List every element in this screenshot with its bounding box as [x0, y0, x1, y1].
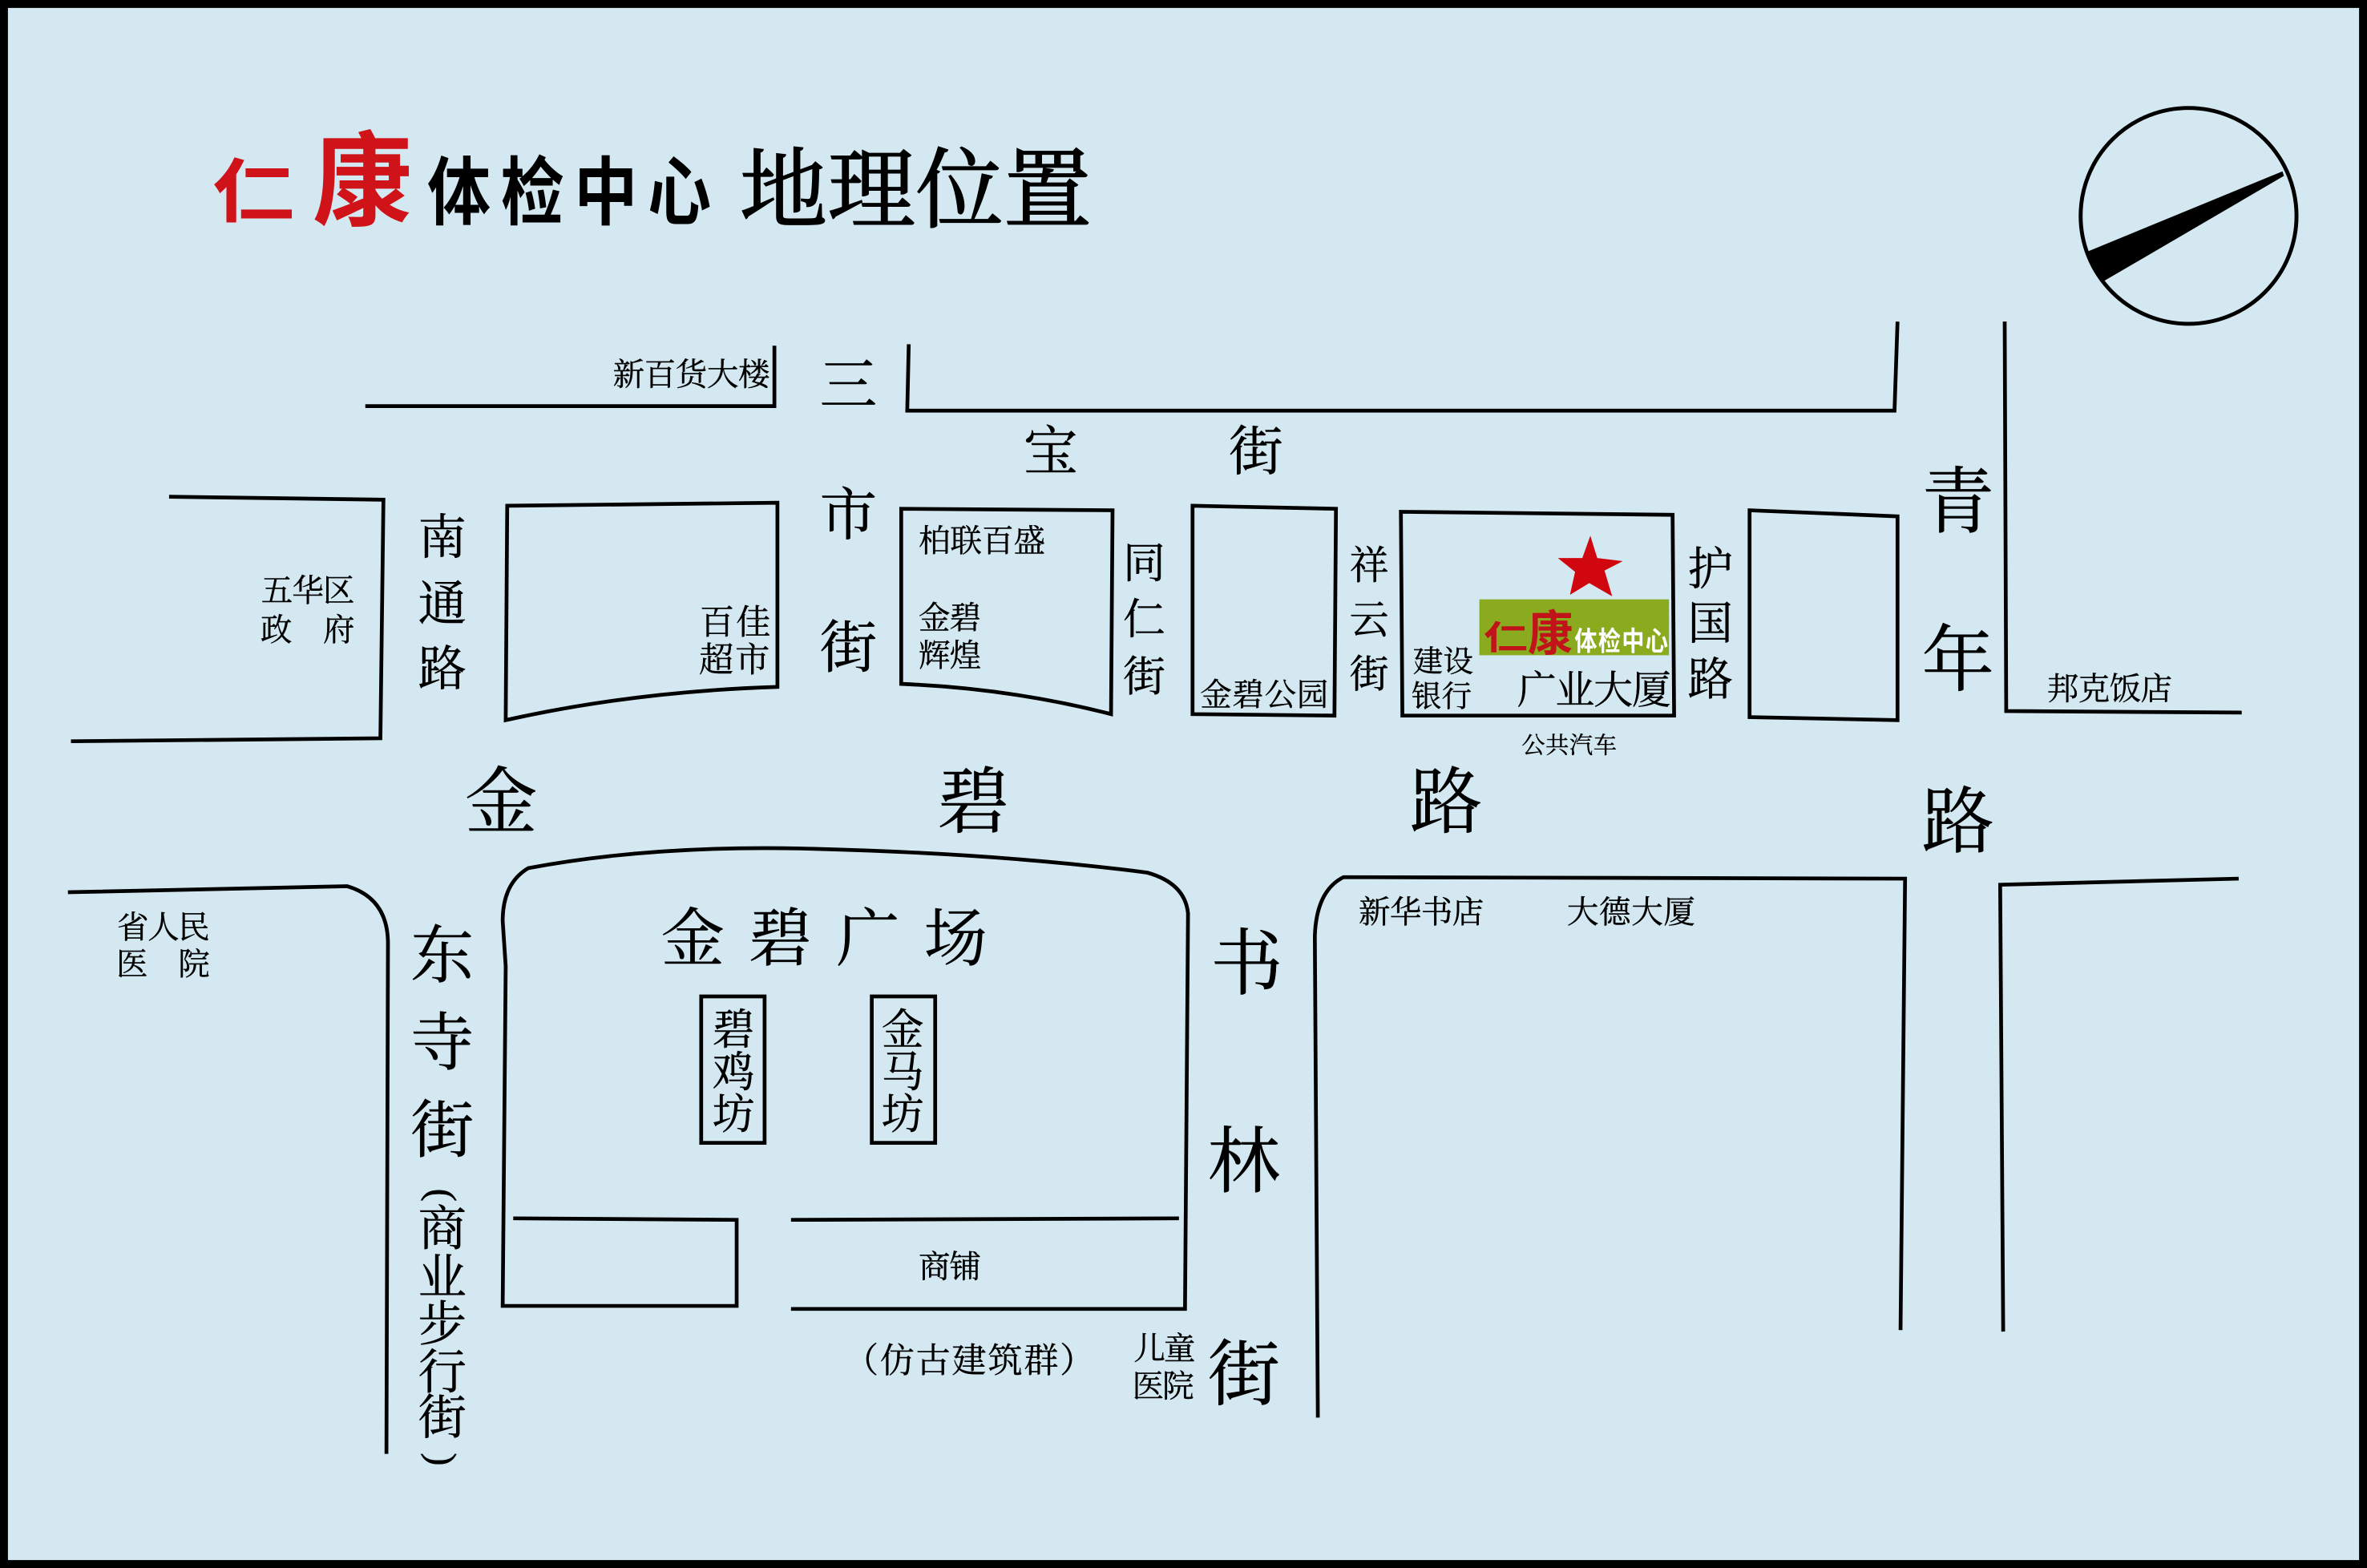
road: 书林街	[1208, 923, 1283, 1415]
road: 祥云街: 云	[1350, 598, 1389, 642]
label: 建设银行: 银行	[1412, 680, 1472, 713]
label: 金碧辉煌: 辉煌	[919, 638, 981, 673]
label: 五华区政府: 五华区	[261, 574, 355, 609]
label: 广业大厦: 广业大厦	[1517, 668, 1671, 712]
road: 同仁街: 街	[1123, 654, 1165, 701]
sign: 仁康体检中心: 康	[1528, 607, 1573, 661]
road note: 商业步行街: 步	[418, 1298, 467, 1352]
label: 儿童医院: 医院	[1132, 1369, 1194, 1404]
road: 南通路: 南	[418, 511, 467, 565]
road: 三市街: 市	[820, 484, 877, 548]
label: 建设银行	[1412, 645, 1473, 713]
logo: 仁康	[213, 125, 412, 240]
label: 五华区政府: 政 府	[261, 612, 355, 648]
label: 新华书店: 新华书店	[1359, 895, 1484, 931]
road: 祥云街: 祥	[1350, 544, 1389, 588]
label: 省人民医院	[116, 910, 210, 983]
plaza label: 金碧广场: 碧	[749, 905, 812, 975]
road note: 商业步行街	[418, 1189, 467, 1466]
label: 建设银行: 建设	[1413, 645, 1473, 679]
label: 百佳超市: 超市	[699, 641, 769, 680]
road: 东寺街	[410, 922, 475, 1166]
sign: 仁康体检中心	[1480, 600, 1669, 661]
label: 商铺: 商铺	[919, 1250, 981, 1285]
label: 碧鸡坊: 坊	[713, 1092, 755, 1138]
sign: 仁康体检中心: 体检中心	[1574, 626, 1668, 657]
road: 护国路: 护	[1688, 545, 1733, 595]
sign: 仁康体检中心: 仁	[1484, 619, 1528, 657]
label: 碧鸡坊	[713, 1008, 755, 1138]
road: 金碧路: 碧	[938, 762, 1010, 843]
label: 百佳超市	[699, 604, 770, 680]
label: 金碧公园: 金碧公园	[1200, 677, 1328, 713]
label: 省人民医院: 医 院	[116, 948, 210, 983]
label: 儿童医院	[1132, 1332, 1196, 1404]
road note: 商业步行街: 街	[418, 1392, 467, 1445]
title: 体检中心: 体检中心	[427, 152, 711, 236]
label: 公共汽车: 公共汽车	[1521, 733, 1617, 759]
road: 宝街	[1024, 422, 1283, 483]
road: 南通路	[418, 511, 467, 697]
label: 金马坊	[882, 1008, 924, 1138]
label: 柏联百盛: 柏联百盛	[919, 523, 1045, 559]
road: 书林街: 街	[1208, 1334, 1280, 1415]
label: 省人民医院: 省人民	[117, 910, 210, 945]
road: 三市街: 三	[820, 354, 877, 418]
plaza label: 金碧广场: 场	[924, 905, 988, 975]
road: 南通路: 路	[418, 643, 467, 697]
road note: 商业步行街: )	[420, 1453, 464, 1466]
road: 金碧路: 路	[1410, 762, 1482, 843]
road: 青年路: 路	[1921, 782, 1994, 863]
road: 书林街: 书	[1210, 923, 1283, 1004]
label: 金马坊: 马	[882, 1049, 924, 1096]
road: 同仁街: 仁	[1123, 596, 1165, 643]
road note: 商业步行街: 业	[418, 1251, 467, 1305]
label: 新百货大楼: 新百货大楼	[613, 358, 770, 393]
map labels	[116, 354, 2172, 1466]
plaza label: 金碧广场: 广	[836, 905, 899, 975]
label: 五华区政府	[261, 574, 355, 648]
road: 金碧路	[465, 762, 1482, 843]
road: 金碧路: 金	[465, 762, 537, 843]
title	[213, 125, 1092, 240]
label: 百佳超市: 百佳	[700, 604, 770, 642]
road: 三市街	[820, 354, 877, 681]
road: 护国路: 国	[1688, 600, 1733, 649]
label: 金碧辉煌: 金碧	[919, 600, 981, 636]
label: 儿童医院: 儿童	[1133, 1332, 1196, 1367]
road: 青年路	[1921, 462, 1994, 863]
road: 护国路	[1688, 545, 1733, 705]
title: 地理位置: 地理位置	[740, 143, 1092, 240]
road: 同仁街	[1123, 541, 1165, 701]
road: 护国路: 路	[1688, 656, 1733, 705]
road: 东寺街: 街	[410, 1097, 474, 1166]
plaza label: 金碧广场	[661, 905, 988, 975]
road: 同仁街: 同	[1123, 541, 1165, 588]
road: 东寺街: 寺	[410, 1009, 474, 1079]
road note: 商业步行街: 行	[418, 1347, 467, 1400]
label: 金马坊: 坊	[882, 1092, 924, 1138]
label: 大德大厦: 大德大厦	[1567, 895, 1695, 931]
road: 三市街: 街	[820, 617, 877, 681]
road: 书林街: 林	[1208, 1121, 1280, 1202]
road: 青年路: 年	[1921, 620, 1994, 701]
road: 青年路: 青	[1921, 462, 1994, 543]
road: 宝街: 街	[1229, 422, 1283, 483]
road outlines and city blocks	[68, 321, 2242, 1454]
road: 南通路: 通	[418, 578, 467, 632]
compass	[2081, 108, 2296, 324]
label: 仿古建筑群: （仿古建筑群）	[844, 1342, 1094, 1380]
logo: 仁康: 康	[313, 125, 412, 240]
road: 祥云街	[1350, 544, 1389, 697]
label: 邦克饭店: 邦克饭店	[2047, 672, 2172, 707]
road: 祥云街: 街	[1350, 653, 1389, 697]
road note: 商业步行街: 商	[418, 1203, 467, 1257]
label: 碧鸡坊: 鸡	[713, 1049, 755, 1096]
road: 宝街: 宝	[1024, 422, 1078, 483]
plaza label: 金碧广场: 金	[661, 905, 725, 975]
label: 碧鸡坊: 碧	[713, 1008, 755, 1054]
logo: 仁康: 仁	[213, 154, 294, 231]
label: 金碧辉煌	[919, 600, 981, 673]
label: 金马坊: 金	[882, 1008, 924, 1054]
road note: 商业步行街: (	[420, 1189, 464, 1202]
marker: red star	[1558, 535, 1623, 596]
road: 东寺街: 东	[410, 922, 475, 992]
